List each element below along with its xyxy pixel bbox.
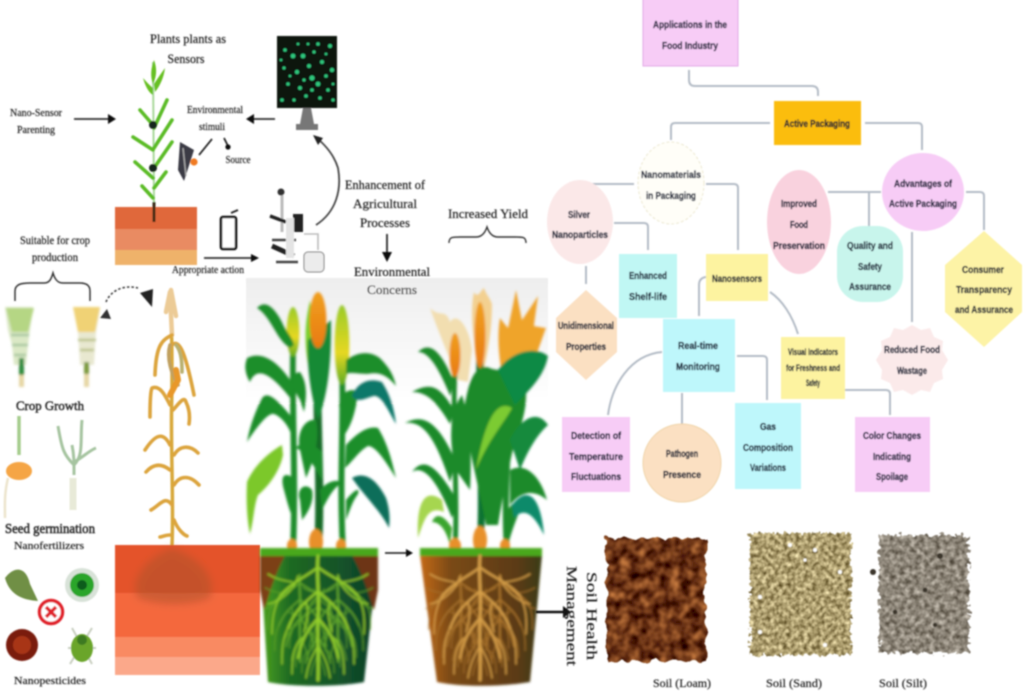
arrow: phone to microscope <box>204 254 259 262</box>
label: environmental concerns <box>354 264 430 297</box>
node: reduced food wastage: Reduced Food <box>884 344 940 356</box>
node: advantages of active packaging <box>882 153 964 231</box>
node: gas composition variations: Gas <box>760 421 776 433</box>
root pot left <box>260 548 378 686</box>
node: visual indicators: Safety <box>806 378 820 388</box>
arrow: pot to soil health <box>536 606 571 618</box>
corn plant trio right <box>405 288 548 554</box>
node: gas composition variations: Variations <box>750 462 786 474</box>
node: color changes indicating spoilage <box>855 417 930 492</box>
box: active packaging <box>774 101 861 145</box>
label: suitable for crop production: production <box>32 252 78 264</box>
node: improved food preservation: Food <box>790 219 808 231</box>
label: environmental stimuli: Environmental <box>187 104 243 116</box>
label: seed germination <box>5 521 95 552</box>
label: increased yield: Increased Yield <box>448 206 528 221</box>
node: real-time monitoring: Real-time <box>678 340 718 352</box>
crop: green wheat <box>5 307 34 387</box>
brace over crops <box>15 273 90 301</box>
plant sensor illustration <box>133 60 172 204</box>
node: nanosensors <box>706 254 768 301</box>
node: consumer transparency and assurance: Transparency <box>956 284 1012 296</box>
node: nanomaterials in packaging: Nanomaterials <box>641 169 701 181</box>
node: enhanced shelf-life: Enhanced <box>629 270 667 282</box>
label: nano-sensor parenting: Nano-Sensor <box>10 107 62 119</box>
node: unidimensional properties: Unidimensional <box>558 320 614 332</box>
box: applications in the food industry: Food Industry <box>662 40 718 52</box>
label: suitable for crop production: Suitable for crop <box>20 235 90 247</box>
box: active packaging: Active Packaging <box>784 118 850 130</box>
dry corn plant <box>145 290 199 545</box>
label: environmental concerns: Environmental <box>354 264 430 279</box>
node: reduced food wastage: Wastage <box>897 365 927 377</box>
label: nano-sensor parenting <box>10 107 62 136</box>
node: unidimensional properties: Properties <box>566 341 606 353</box>
node: improved food preservation: Improved <box>781 198 817 210</box>
monitor icon <box>277 36 337 130</box>
label: environmental concerns: Concerns <box>367 282 417 297</box>
node: quality and safety assurance <box>837 226 903 302</box>
node: detection of temperature fluctuations: Temperature <box>569 451 623 463</box>
icon: sensor speaker <box>178 139 212 181</box>
node: detection of temperature fluctuations: Detection of <box>571 430 621 442</box>
node: real-time monitoring <box>663 319 735 392</box>
label: nano-sensor parenting: Parenting <box>17 124 55 136</box>
icon: green bug <box>68 628 96 664</box>
node: enhanced shelf-life <box>619 254 677 318</box>
box: applications in the food industry: Applications in the <box>653 19 727 31</box>
node: nanomaterials in packaging: in Packaging <box>646 190 696 202</box>
large soil block <box>115 545 260 675</box>
node: color changes indicating spoilage: Spoilage <box>876 471 908 483</box>
icon: prohibition <box>40 600 62 624</box>
node: reduced food wastage <box>876 325 948 395</box>
node: gas composition variations <box>735 403 801 489</box>
label: plants as sensors: Sensors <box>168 51 204 66</box>
dashed arc with arrowheads <box>100 287 153 319</box>
label: environmental stimuli: stimuli <box>199 121 225 133</box>
node: consumer transparency and assurance: Consumer <box>962 264 1004 276</box>
label: plants as sensors: Plants plants as <box>150 31 226 46</box>
label: soil health management: Soil Health <box>583 572 599 661</box>
seed germination illustration <box>5 416 32 518</box>
label: suitable for crop production <box>20 235 90 264</box>
label: enhancement of agricultural processes: Processes <box>360 215 410 230</box>
corn plant trio left <box>245 292 396 555</box>
label: soil silt: Soil (Silt) <box>879 676 927 690</box>
soil swatch: silt <box>870 535 969 653</box>
node: advantages of active packaging: Active Packaging <box>889 198 957 210</box>
node: enhanced shelf-life: Shelf-life <box>629 291 667 303</box>
node: detection of temperature fluctuations <box>562 417 630 492</box>
label: seed germination: Nanofertilizers <box>14 541 84 552</box>
label: plants as sensors <box>150 31 226 66</box>
icon: leaf <box>5 570 38 601</box>
label: source: Source <box>226 155 251 166</box>
label: soil health management <box>563 566 599 667</box>
icon: red seed <box>6 629 38 661</box>
node: visual indicators: Visual indicators <box>788 347 838 357</box>
node: unidimensional properties <box>556 290 617 380</box>
node: improved food preservation <box>767 170 831 274</box>
box: applications in the food industry <box>643 0 738 66</box>
node: gas composition variations: Composition <box>743 442 793 454</box>
label: appropriate action: Appropriate action <box>172 265 245 276</box>
arrow: monitor to stimuli <box>246 114 275 124</box>
icon: microscope <box>270 188 324 272</box>
node: quality and safety assurance: Quality and <box>847 240 893 252</box>
node: real-time monitoring: Monitoring <box>676 361 720 373</box>
label: enhancement of agricultural processes <box>345 177 426 230</box>
node: quality and safety assurance: Assurance <box>849 281 891 293</box>
label: increased yield <box>448 206 528 243</box>
root pot right <box>420 548 542 686</box>
arrow: down to concerns <box>382 234 392 262</box>
node: nanosensors: Nanosensors <box>712 273 762 285</box>
connectors of flowchart <box>584 70 984 425</box>
label: environmental stimuli <box>187 104 243 133</box>
label: crop growth: Crop Growth <box>16 398 84 413</box>
node: nanomaterials in packaging <box>638 142 704 224</box>
node: silver nanoparticles: Nanoparticles <box>552 229 608 241</box>
node: advantages of active packaging: Advantages of <box>894 178 952 190</box>
node: visual indicators: for Freshness and <box>786 363 840 373</box>
label: nanopesticides: Nanopesticides <box>14 676 86 687</box>
label: soil loam: Soil (Loam) <box>653 676 711 690</box>
node: quality and safety assurance: Safety <box>858 261 882 273</box>
crop: yellow wheat <box>73 307 100 387</box>
node: visual indicators <box>781 337 845 399</box>
icon: smartphone <box>221 210 238 249</box>
node: pathogen presence <box>643 424 721 502</box>
label: enhancement of agricultural processes: Agricultural <box>353 196 417 211</box>
node: detection of temperature fluctuations: Fluctuations <box>571 471 621 483</box>
label: source <box>224 138 251 166</box>
label: soil sand: Soil (Sand) <box>766 676 822 690</box>
node: pathogen presence: Presence <box>663 469 701 481</box>
grey backdrop <box>246 278 548 403</box>
label: seed germination: Seed germination <box>5 521 95 536</box>
soil swatch: sand <box>750 533 851 655</box>
node: improved food preservation: Preservation <box>773 240 825 252</box>
arrow: between pots <box>385 549 413 557</box>
arrow: microscope to monitor curve <box>313 135 339 225</box>
node: color changes indicating spoilage: Color Changes <box>863 430 921 442</box>
label: enhancement of agricultural processes: Enhancement of <box>345 177 426 192</box>
arrow: parenting to plant <box>74 114 116 124</box>
node: silver nanoparticles <box>547 180 613 264</box>
node: color changes indicating spoilage: Indicating <box>873 451 911 463</box>
label: soil health management: Management <box>563 566 579 667</box>
soil swatch: loam <box>607 538 706 661</box>
node: pathogen presence: Pathogen <box>666 448 698 460</box>
icon: virus <box>65 568 99 602</box>
node: consumer transparency and assurance <box>945 231 1022 347</box>
soil block small <box>115 202 197 265</box>
node: silver nanoparticles: Silver <box>568 209 590 221</box>
seedling illustration <box>58 420 96 510</box>
